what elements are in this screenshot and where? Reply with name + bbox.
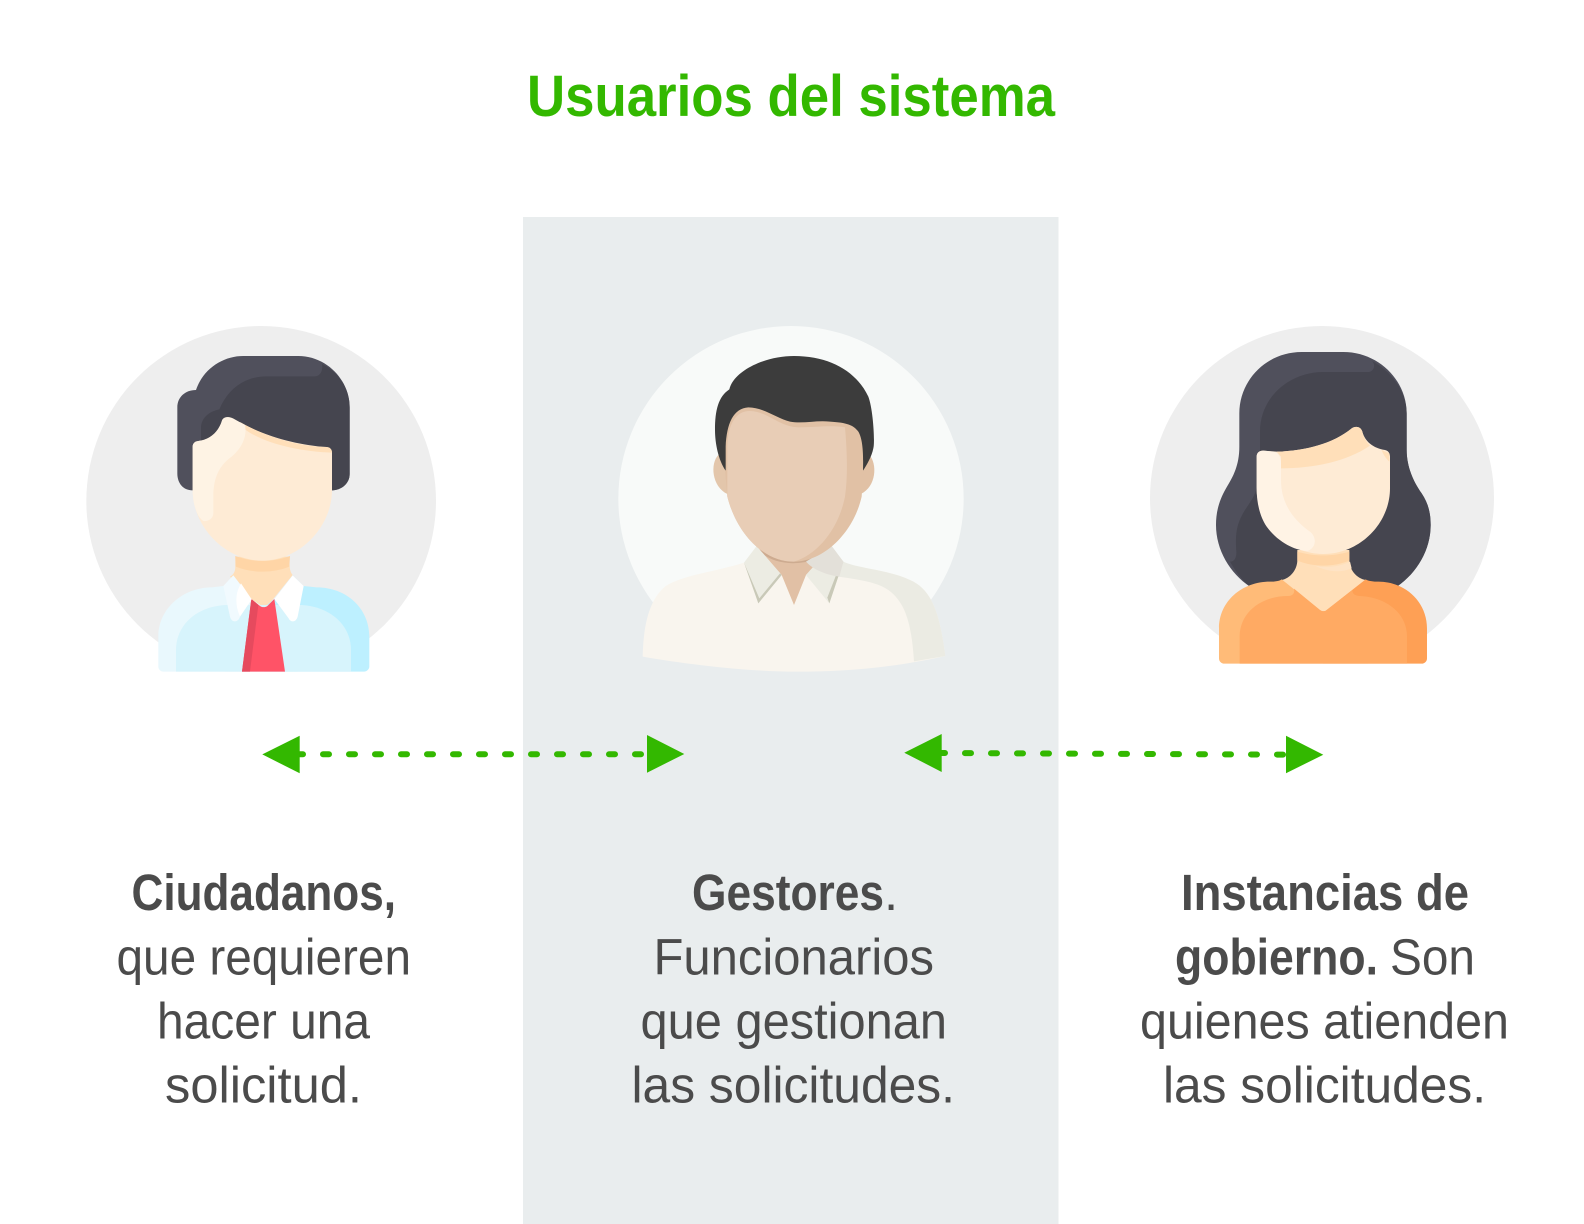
face bbox=[724, 404, 864, 562]
text block: government: las solicitudes. bbox=[1163, 1056, 1486, 1114]
hair bbox=[1216, 352, 1431, 587]
text block: managers: . bbox=[884, 864, 898, 921]
text block: government: quienes atienden bbox=[1140, 992, 1509, 1050]
text block: managers: Funcionarios bbox=[654, 928, 934, 986]
icon: government woman avatar bbox=[1150, 326, 1494, 670]
face bbox=[1257, 427, 1390, 554]
hair bbox=[177, 356, 350, 490]
text block: citizens: que requieren bbox=[116, 928, 411, 986]
collar bbox=[223, 575, 304, 621]
neck bbox=[230, 556, 293, 607]
text block: citizens bbox=[116, 864, 411, 1114]
shirt bbox=[158, 575, 369, 672]
icon: citizen avatar bbox=[86, 326, 436, 676]
panel: central gray column bbox=[523, 217, 1058, 1224]
arrow: managers to government bbox=[904, 734, 1323, 773]
collar bbox=[744, 546, 843, 603]
text block: government bbox=[1140, 864, 1509, 1114]
icon: manager avatar bbox=[618, 326, 964, 672]
neck bbox=[1282, 550, 1366, 611]
text block: managers: Gestores bbox=[692, 864, 884, 921]
avatar background circle bbox=[1150, 326, 1494, 636]
text block: managers bbox=[632, 864, 955, 1114]
arrow: citizens to managers bbox=[262, 735, 684, 773]
avatar background circle bbox=[86, 326, 436, 676]
title: Usuarios del sistema bbox=[527, 64, 1056, 129]
text block: managers: las solicitudes. bbox=[632, 1056, 955, 1114]
neck bbox=[757, 547, 832, 605]
sweater bbox=[1219, 579, 1427, 664]
text block: government: Instancias de bbox=[1181, 864, 1469, 921]
shirt bbox=[643, 562, 945, 672]
hair bbox=[715, 356, 874, 471]
text block: citizens: hacer una bbox=[157, 992, 371, 1050]
text block: citizens: solicitud. bbox=[165, 1056, 362, 1114]
avatar background circle bbox=[618, 326, 964, 671]
ears bbox=[713, 455, 874, 494]
text block: government: gobierno. bbox=[1175, 928, 1378, 986]
tie bbox=[242, 599, 285, 672]
face bbox=[193, 417, 332, 561]
text block: citizens: Ciudadanos, bbox=[132, 864, 396, 921]
text block: managers: que gestionan bbox=[640, 992, 947, 1050]
text block: government: Son bbox=[1390, 928, 1475, 986]
